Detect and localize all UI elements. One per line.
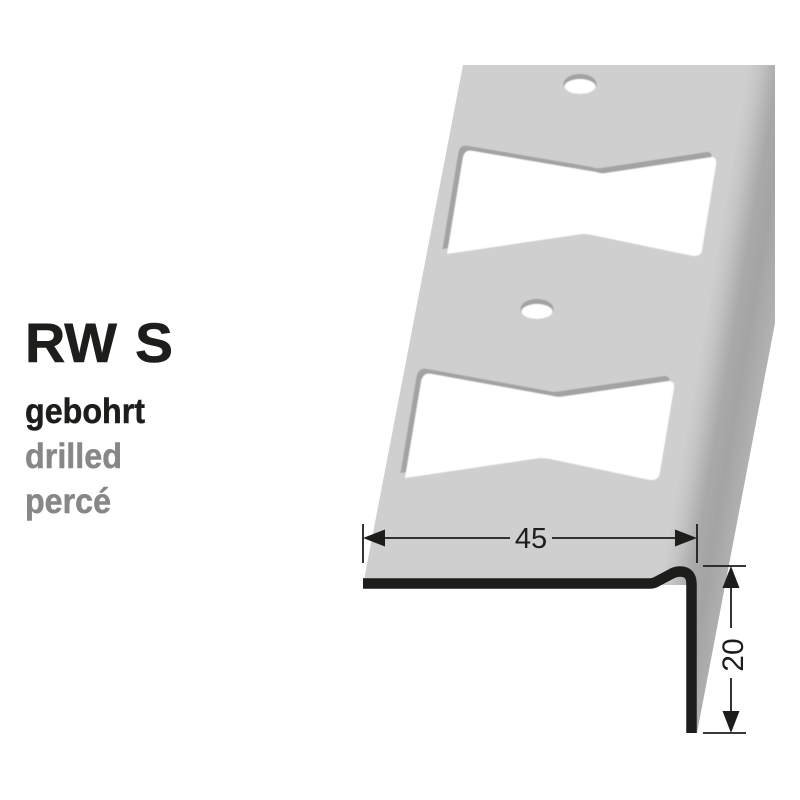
window bottom [400,369,674,480]
dimension: 45 width: 45 [515,523,547,555]
label: drilled: drilled [25,437,122,476]
title: RW S: S [135,311,173,374]
text block: product variants [25,392,145,521]
screw hole top [564,74,596,94]
title: RW S [25,311,173,374]
label: percé: percé [25,482,111,521]
dimension: 20 height: 20 [717,638,750,672]
title: RW S: RW [25,311,117,374]
dimension: 20 height [703,566,750,733]
label: gebohrt: gebohrt [25,392,145,431]
window top [442,146,716,256]
profile rail illustration [363,65,775,733]
screw hole bottom [520,299,554,319]
profile cross-section [363,572,692,733]
rail body [363,65,775,733]
dimension: 45 width [363,523,697,563]
